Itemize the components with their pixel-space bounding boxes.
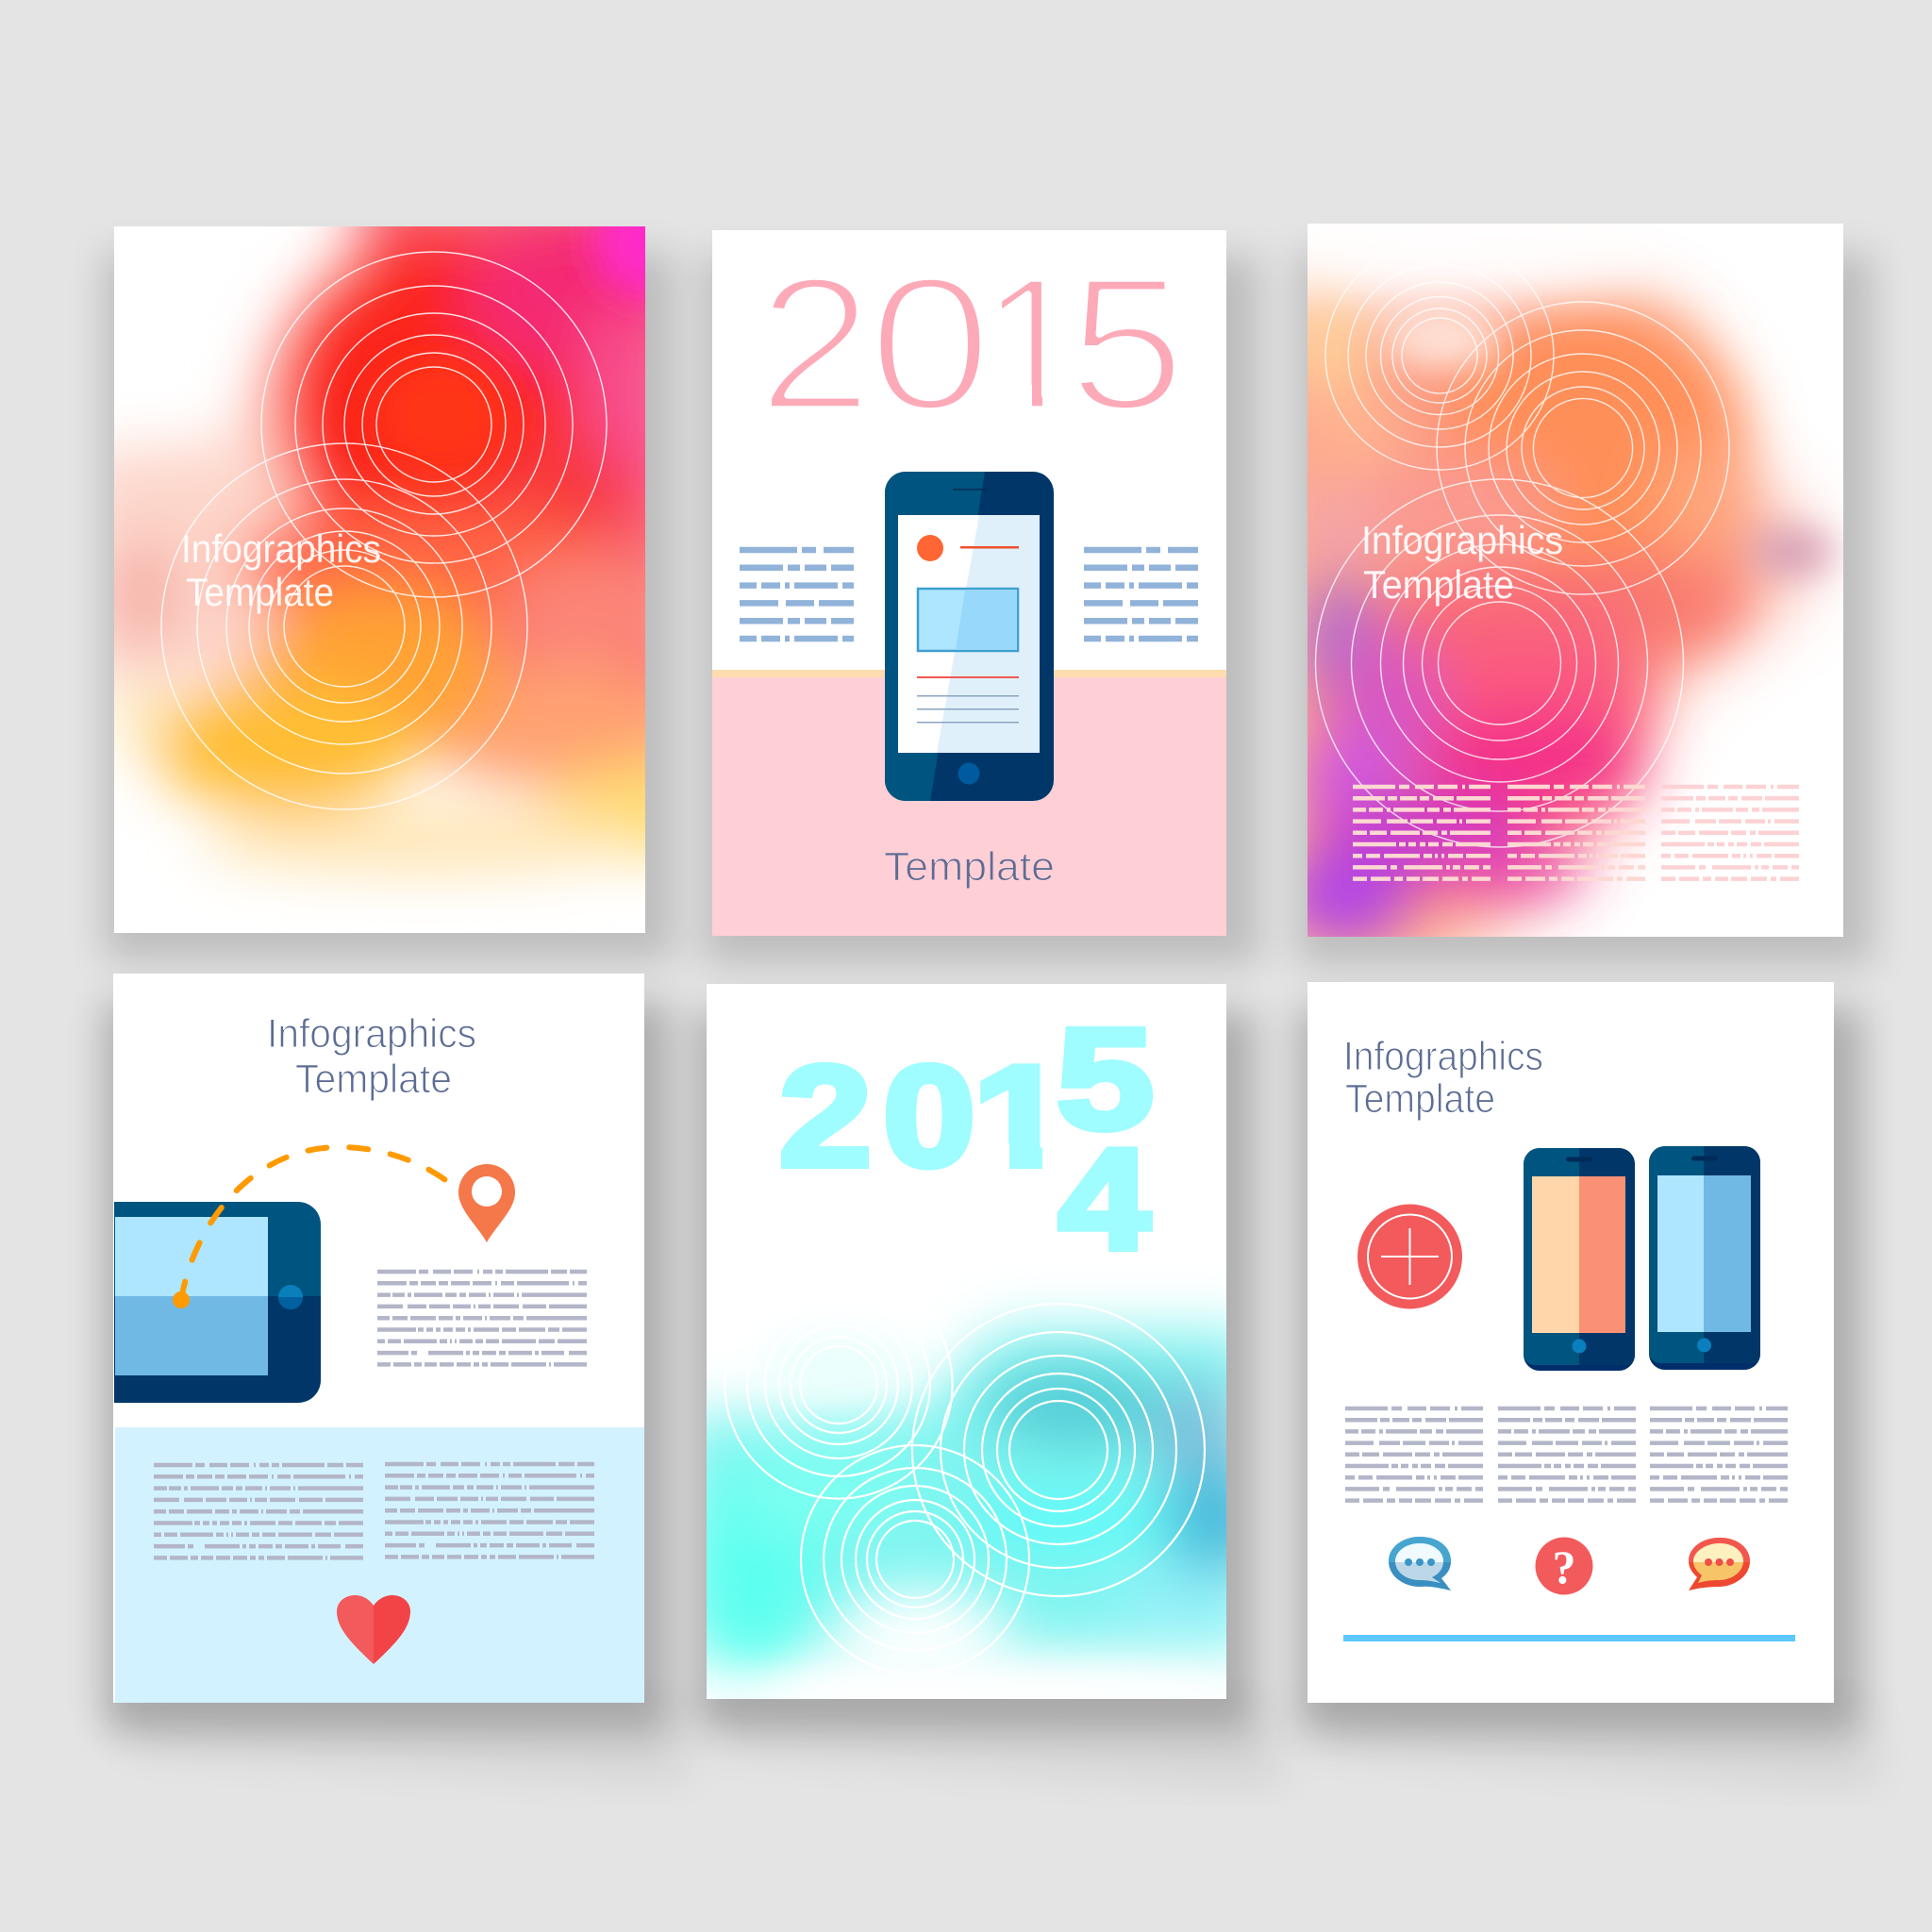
heading: Infographics (181, 526, 381, 571)
icon: question mark (1536, 1538, 1592, 1594)
year 2015 with stacked 4 (779, 999, 1154, 1279)
icon: plus circle (1357, 1204, 1462, 1309)
year 2015 with stacked 4: 5 (1057, 999, 1154, 1159)
drop shadows of the bottom row (104, 1002, 1862, 1729)
panel: orange gradient cover (114, 226, 645, 933)
heading (181, 526, 381, 614)
text lines right column (385, 1464, 594, 1557)
year 2015: 5 (1068, 237, 1186, 450)
heading (267, 1011, 476, 1102)
concentric rings (161, 252, 607, 809)
heading: Template (1345, 1076, 1495, 1122)
gradient glow (1307, 255, 1843, 937)
year 2015: 1 (980, 237, 1086, 450)
heading (1343, 1034, 1543, 1122)
panel: tablet and location (113, 974, 644, 1703)
year 2015 with stacked 4: 0 (883, 1036, 975, 1196)
heading: Template (186, 570, 334, 614)
soft floor shadows under the bottom row (123, 1703, 1877, 1783)
text lines by the tablet (377, 1272, 587, 1364)
icon: heart (337, 1595, 410, 1664)
blue footer line (1343, 1635, 1795, 1641)
year 2015 with stacked 4: 1 (973, 1036, 1068, 1196)
icon: question mark: ? (1553, 1541, 1575, 1593)
text lines right (1084, 550, 1198, 639)
year 2015: 2 (758, 237, 873, 450)
footer label: Template (884, 844, 1055, 890)
icon: phone with peach screen (1524, 1148, 1635, 1371)
concentric rings (724, 1271, 1205, 1674)
gradient glow (679, 1330, 1274, 1714)
panel: phone cover 2015 (712, 230, 1226, 936)
icon: map pin (458, 1164, 515, 1242)
gradient glow (114, 226, 645, 906)
text lines left (740, 550, 854, 639)
icon: orange speech bubble (1689, 1538, 1750, 1591)
drop shadows of the top row (104, 253, 1873, 965)
year 2015 (758, 237, 1186, 450)
panel: cyan gradient cover (707, 984, 1226, 1699)
peach stripe (712, 670, 1226, 677)
text lines column 1 (1353, 787, 1491, 879)
heading: Infographics (1343, 1034, 1543, 1079)
year 2015: 0 (868, 237, 992, 450)
panel: pink purple gradient cover (1307, 224, 1843, 937)
text lines column 1 (1345, 1408, 1483, 1501)
heading: Template (295, 1057, 452, 1102)
concentric rings (1315, 242, 1729, 847)
heading: Template (1363, 562, 1514, 607)
text lines left column (154, 1465, 363, 1557)
text lines column 2 (1507, 787, 1645, 879)
heading: Infographics (1361, 518, 1563, 562)
text lines column 2 (1498, 1408, 1636, 1501)
pink footer band (712, 677, 1226, 936)
blue lower section (115, 1427, 644, 1703)
year 2015 with stacked 4: 2 (779, 1036, 872, 1196)
year 2015 with stacked 4: 4 (1058, 1119, 1150, 1279)
icon: blue speech bubble (1389, 1537, 1451, 1591)
panel: two phones and icons (1307, 982, 1834, 1703)
icon: phone with blue screen (1649, 1146, 1760, 1370)
arrow: dashed route (175, 1147, 453, 1306)
icon: phone (885, 472, 1054, 801)
heading (1361, 518, 1563, 607)
text lines column 3 (1650, 1408, 1788, 1501)
heading: Infographics (267, 1011, 476, 1057)
text lines column 3 (1661, 787, 1799, 879)
icon: tablet (114, 1202, 321, 1403)
